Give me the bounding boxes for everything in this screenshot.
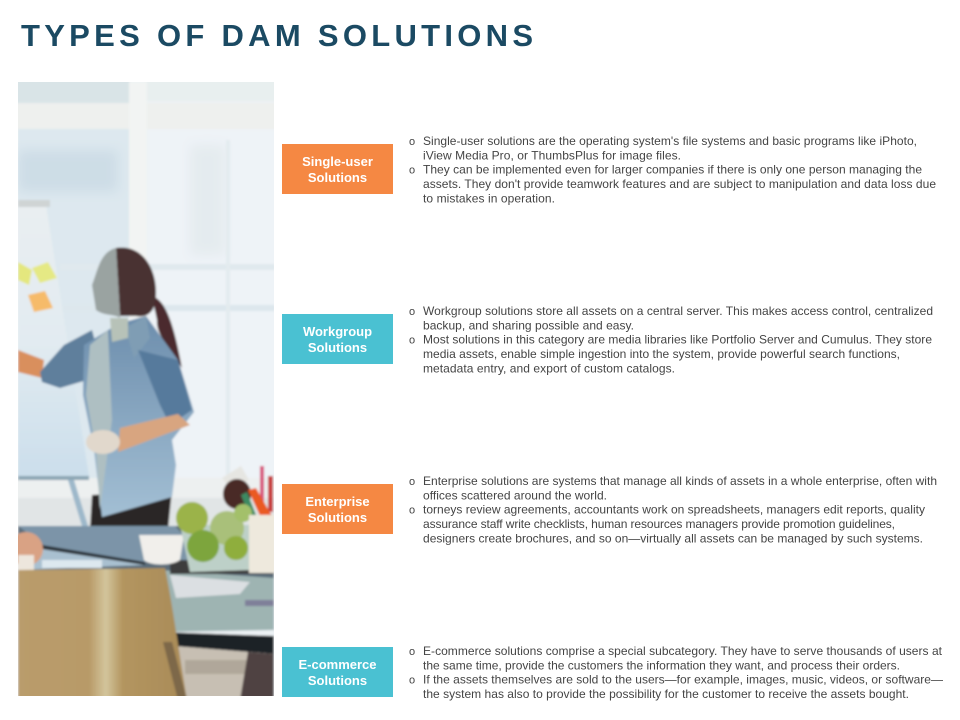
label: Single-user Solutions: Solutions xyxy=(308,170,367,185)
label: E-commerce Solutions: Solutions xyxy=(308,673,367,688)
text block: Workgroup Solutions: o xyxy=(409,306,415,318)
left foreground hand xyxy=(18,530,45,564)
label: Enterprise Solutions xyxy=(282,484,393,534)
ponytail xyxy=(152,296,182,368)
text block: Single-user Solutions: iView Media Pro, or ThumbsPlus for image files. xyxy=(423,148,681,162)
text block: E-commerce Solutions: o xyxy=(409,646,415,658)
title: TYPES OF DAM SOLUTIONS xyxy=(21,18,533,53)
text block: Single-user Solutions: o xyxy=(409,164,415,176)
label: E-commerce Solutions xyxy=(282,647,393,697)
label: E-commerce Solutions: E-commerce xyxy=(298,657,377,672)
shirt xyxy=(83,316,194,517)
text block: Enterprise Solutions: designers create brochures, and so on—virtually all assets can be managed by such systems. xyxy=(423,531,923,545)
photo: woman presenting at a flipchart xyxy=(9,75,282,705)
label: Single-user Solutions: Single-user xyxy=(302,154,373,169)
label: Workgroup Solutions xyxy=(282,314,393,364)
text block: E-commerce Solutions: the same time, provide the customers the information they want, and process their orders. xyxy=(423,658,900,672)
text block: Workgroup Solutions: media assets, enable simple ingestion into the system, provide powerful search functions, xyxy=(423,347,900,361)
text block: E-commerce Solutions: the system has also to provide the possibility for the customer to receive the assets bought. xyxy=(423,687,909,701)
label: Workgroup Solutions: Workgroup xyxy=(303,324,372,339)
text block: Enterprise Solutions: o xyxy=(409,476,415,488)
text block: Single-user Solutions: o xyxy=(409,136,415,148)
label: Enterprise Solutions: Enterprise xyxy=(305,494,370,509)
text block: Single-user Solutions: to mistakes in operation. xyxy=(423,191,555,205)
text block: Workgroup Solutions: o xyxy=(409,334,415,346)
text block: E-commerce Solutions: If the assets themselves are sold to the users—for example, images, music, videos, or software— xyxy=(423,672,943,686)
text block: Enterprise Solutions xyxy=(409,474,937,545)
text block: Workgroup Solutions: metadata entry, and export of custom catalogs. xyxy=(423,361,675,375)
text block: Workgroup Solutions: backup, and sharing possible and easy. xyxy=(423,318,634,332)
text block: Enterprise Solutions: Enterprise solutions are systems that manage all kinds of assets in a whole enterprise, often with xyxy=(423,474,937,488)
label: Single-user Solutions xyxy=(282,144,393,194)
collar neck xyxy=(110,318,128,342)
head and hair xyxy=(116,248,156,316)
label: Workgroup Solutions: Solutions xyxy=(308,340,367,355)
text block: Enterprise Solutions: assurance staff write checklists, human resources managers provide promotion guidelines, xyxy=(423,517,895,531)
hand with phone, pencils xyxy=(223,466,248,483)
text block: Single-user Solutions: Single-user solutions are the operating system's file systems and basic programs like iPhoto, xyxy=(423,134,917,148)
pants xyxy=(88,493,172,528)
text block: Enterprise Solutions: o xyxy=(409,504,415,516)
text block: Single-user Solutions xyxy=(409,134,936,205)
text block: Enterprise Solutions: torneys review agreements, accountants work on spreadsheets, managers edit reports, quality xyxy=(423,502,925,516)
arm to chart xyxy=(18,350,44,378)
chair xyxy=(18,568,187,700)
text block: E-commerce Solutions: E-commerce solutions comprise a special subcategory. They have to serve thousands of users at xyxy=(423,644,943,658)
text block: E-commerce Solutions xyxy=(409,644,943,701)
forearm and hand xyxy=(118,414,190,452)
flipchart xyxy=(18,205,89,478)
table xyxy=(18,524,274,580)
bottle xyxy=(249,515,275,573)
text block: E-commerce Solutions: o xyxy=(409,674,415,686)
text block: Workgroup Solutions xyxy=(409,304,933,375)
text block: Workgroup Solutions: Most solutions in this category are media libraries like Portfolio Server and Cumulus. They store xyxy=(423,332,932,346)
label: Enterprise Solutions: Solutions xyxy=(308,510,367,525)
text block: Single-user Solutions: assets. They don't provide teamwork features and are subject to manipulation and data loss due xyxy=(423,177,936,191)
fruit bowl xyxy=(180,525,250,572)
text block: Single-user Solutions: They can be implemented even for larger companies if there is only one person managing the xyxy=(423,162,922,176)
text block: Workgroup Solutions: Workgroup solutions store all assets on a central server. This makes access control, centralized xyxy=(423,304,933,318)
cup xyxy=(139,535,184,564)
text block: Enterprise Solutions: offices scattered around the world. xyxy=(423,488,607,502)
